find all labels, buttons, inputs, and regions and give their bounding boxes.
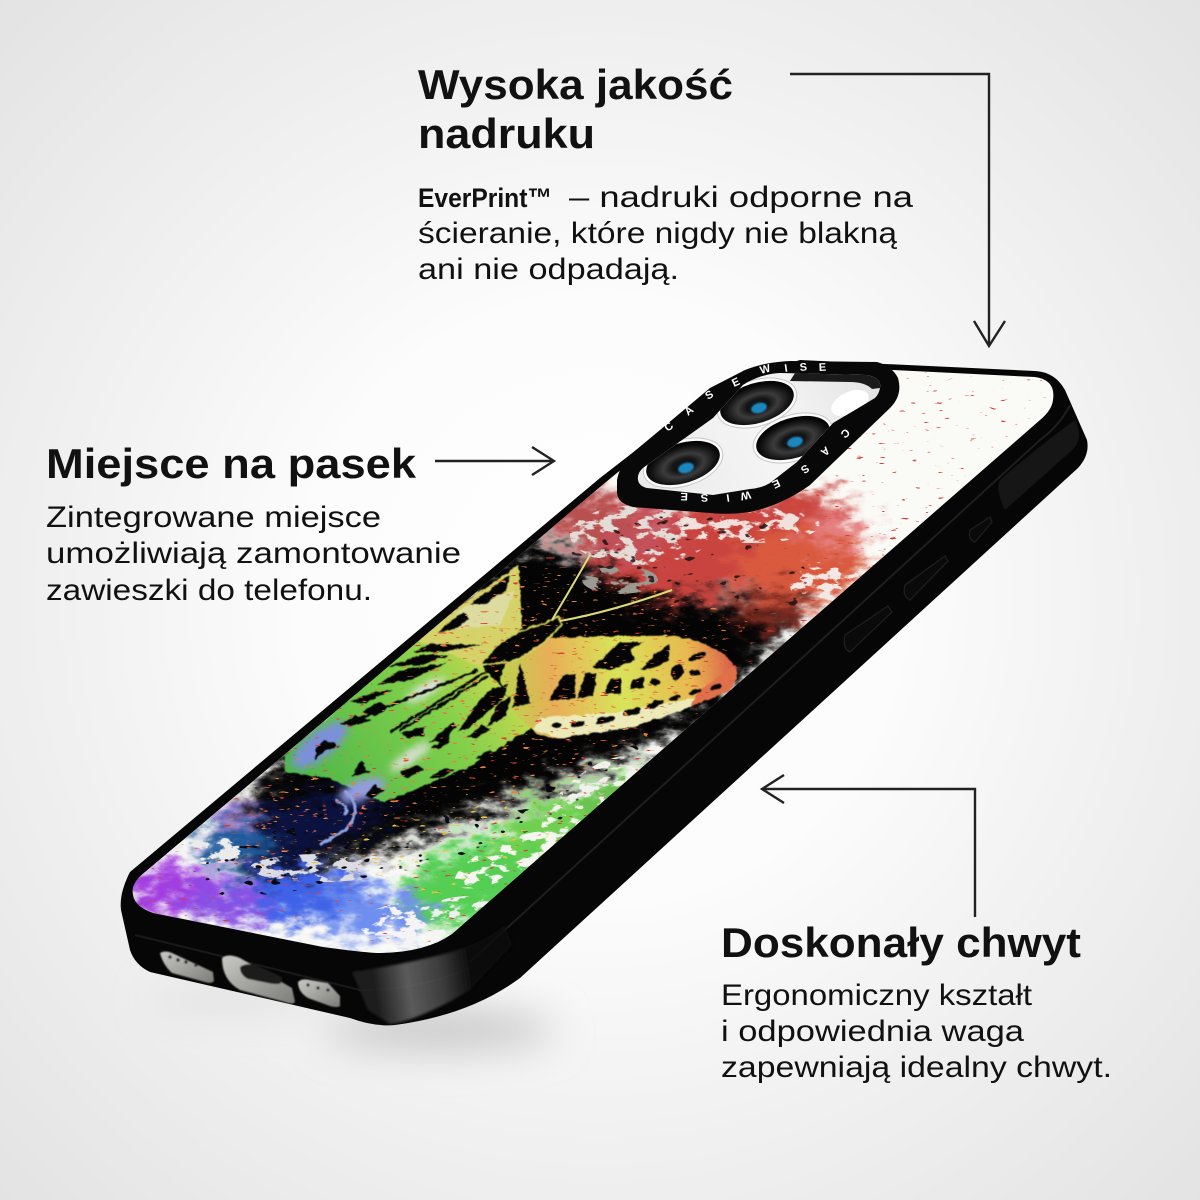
body text: strap slot: Zintegrowane miejsce	[46, 501, 381, 534]
camera module glass	[638, 373, 880, 495]
callout: strap slot	[46, 440, 554, 607]
arrow: to case side	[762, 775, 975, 917]
callout: print quality	[418, 61, 1005, 346]
heading: print quality: Wysoka jakość	[418, 61, 733, 108]
camera aperture	[638, 373, 880, 495]
body text: strap slot	[46, 501, 461, 607]
dense orange flecks on dark band	[240, 560, 760, 900]
right lens	[752, 412, 832, 464]
side buttons	[844, 517, 992, 652]
bottom right speaker	[298, 979, 340, 1007]
ring lettering	[662, 361, 852, 503]
ring lettering: CASEWISE	[680, 426, 852, 503]
body text: print quality: ani nie odpadają.	[418, 253, 679, 286]
body text: print quality: EverPrint™	[418, 183, 552, 213]
body text: strap slot: zawieszki do telefonu.	[46, 574, 372, 607]
white paint patches	[165, 505, 870, 949]
black droplets	[170, 510, 830, 900]
heading: print quality: nadruku	[418, 110, 595, 157]
camera ring	[617, 361, 899, 514]
upper wing	[415, 565, 522, 668]
flash highlight	[832, 390, 868, 416]
left lens	[642, 437, 724, 489]
strap slot on side	[998, 420, 1079, 510]
antennae	[552, 555, 672, 621]
glossy lower corner	[352, 925, 512, 1024]
bottom left speaker	[160, 952, 214, 983]
upper wing black tip	[470, 575, 510, 604]
aperture shadow	[790, 373, 880, 389]
tail arcs	[320, 790, 355, 845]
case side ridge lines	[135, 405, 1070, 990]
arrow: to print surface	[790, 74, 1005, 346]
case body	[121, 360, 1088, 1025]
body text: grip	[721, 979, 1112, 1084]
body text: print quality: – nadruki odporne na	[569, 181, 913, 214]
top lens	[717, 377, 798, 429]
paint blotches	[123, 468, 865, 947]
butterfly	[285, 565, 737, 845]
callout: grip	[721, 775, 1112, 1084]
body text: grip: zapewniają idealny chwyt.	[721, 1051, 1112, 1084]
heading: print quality	[418, 61, 733, 157]
wing markings	[315, 575, 722, 798]
right forewing	[500, 635, 736, 738]
phone case	[100, 340, 1100, 1025]
green tail wing	[285, 640, 537, 802]
body text: strap slot: umożliwiają zamontowanie	[46, 537, 461, 570]
heading: grip: Doskonały chwyt	[721, 919, 1081, 966]
heading: strap slot: Miejsce na pasek	[46, 440, 417, 487]
butterfly body	[480, 617, 562, 665]
sparse red flecks	[130, 370, 1055, 950]
printed back artwork	[132, 370, 1054, 953]
body text: print quality: ścieranie, które nigdy nie blakną	[418, 217, 897, 250]
charging port	[222, 956, 295, 1004]
body text: print quality	[418, 181, 913, 286]
body text: grip: Ergonomiczny kształt	[721, 979, 1033, 1012]
left stripes	[413, 644, 483, 652]
body text: grip: i odpowiednia waga	[721, 1015, 1024, 1048]
drop shadow under phone	[150, 990, 555, 1050]
arrow: to strap slot	[435, 447, 554, 475]
blue wing patches	[285, 674, 447, 808]
ring lettering: CASEWISE	[662, 361, 826, 434]
wing veins	[360, 670, 488, 732]
